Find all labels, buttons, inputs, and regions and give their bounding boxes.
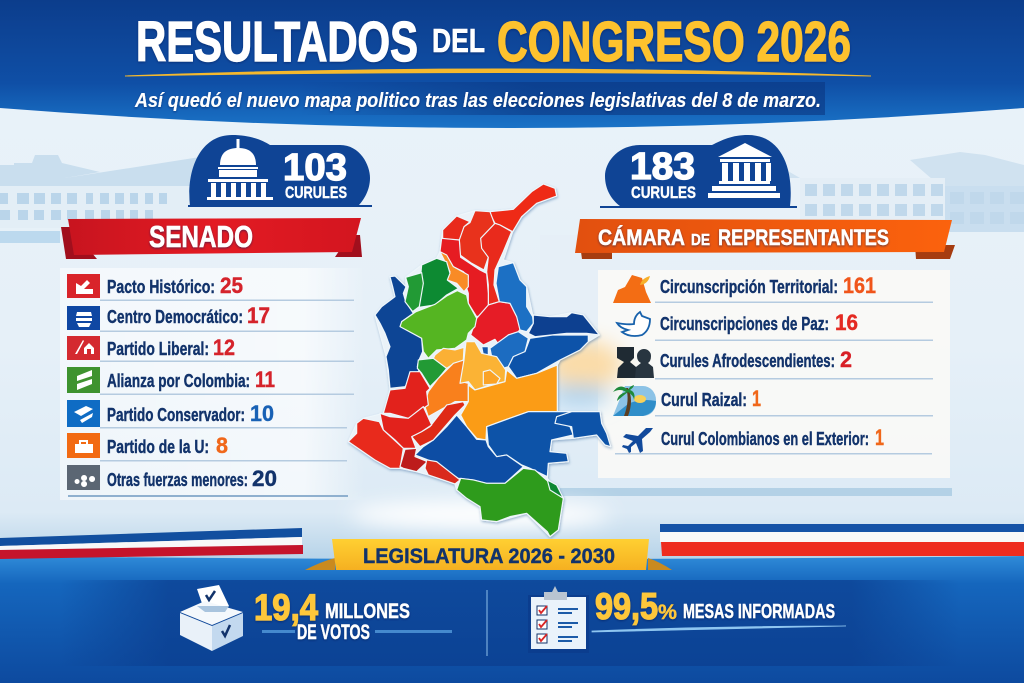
stat: mesas informadas: 99,5 [595,586,658,627]
region: Caldas [433,347,464,368]
banner text: SENADO [149,219,253,254]
icon: ballot box [180,585,243,651]
row: Pacto Historico: Pacto Histórico: [107,277,215,297]
stat: mesas informadas: % [658,601,677,624]
stats strip [60,580,960,666]
region: Cundinamarca [460,342,506,390]
stat: votos: DE VOTOS [297,621,370,644]
number 103: 103 [283,147,347,189]
camara seat badge [600,135,797,208]
row: Curul Raizal [613,385,933,416]
row: Curul Colombianos en el Exterior [615,425,932,454]
row: Curules Afrodescendientes: Curules Afrodescendientes: [660,351,835,371]
region: Cesar [481,223,512,305]
row: Alianza por Colombia [67,367,354,395]
badge baseline [600,206,797,208]
region: Bogota [483,370,500,385]
stat: mesas informadas: MESAS INFORMADAS [683,601,835,623]
banner text: LEGISLATURA 2026 - 2030 [363,545,615,568]
row: Partido Conservador: Partido Conservador: [107,405,245,425]
colombia map [348,184,611,537]
region: Cordoba [440,252,468,292]
region: Boyaca [471,302,525,347]
panel: senado list background [60,268,365,500]
row: Partido de la U: 8 [216,433,228,458]
region: Bolivar sur [440,238,488,317]
icon: clipboard checklist [528,586,589,653]
region: Casanare [490,332,528,368]
stat underline: mesas [592,626,846,632]
subtitle: Así quedó el nuevo mapa politico tras las elecciones legislativas del 8 de marzo. [134,90,821,112]
region: Antioquia [400,291,477,358]
region: Vaupes [555,412,611,447]
background: faint congress buildings [0,145,1024,325]
row: Alianza por Colombia: 11 [255,367,275,392]
banner text: DE [691,232,710,249]
title: RESULTADOS [136,10,418,74]
region: Putumayo este [425,460,460,484]
region: Huila [412,402,465,447]
row: Curul Colombianos en el Exterior: 1 [875,425,884,450]
number 183: 183 [630,146,695,188]
subtitle strip [300,82,825,115]
banner text: REPRESENTANTES [718,225,889,250]
row: Partido Liberal: 12 [213,335,235,360]
row: Centro Democratico [67,303,354,332]
background glow near map [350,341,623,529]
title: CONGRESO 2026 [497,10,851,74]
senado seat badge [188,135,372,207]
region: Bolivar norte [443,216,470,240]
stat: mesas informadas [595,586,835,627]
label curules: CURULES [631,183,696,202]
row: Partido Liberal: Partido Liberal: [107,339,209,359]
senado list [67,273,354,497]
banner body [68,218,361,255]
region: Valle [383,372,430,418]
region: Vichada [508,335,588,378]
row: Otras fuerzas menores: Otras fuerzas menores: [107,470,248,490]
badge baseline [188,205,372,207]
banner tails [580,245,955,259]
region: Amazonas [457,468,563,537]
row: Circunscripciones de Paz: 16 [835,310,858,335]
panel: camara list background [560,270,952,496]
badge shape [189,135,370,206]
region: small blue [482,347,488,355]
row: Centro Democratico: Centro Democrático: [107,307,243,327]
region: Arauca [528,313,599,337]
stat: votos [254,587,410,644]
region: Putumayo [400,448,427,472]
region: Uraba [405,273,423,312]
stat: votos: MILLONES [325,600,410,623]
title underline [125,69,871,76]
row: Curul Colombianos en el Exterior: Curul Colombianos en el Exterior: [661,429,869,449]
row: Circunscripciones de Paz [617,310,933,341]
banner tails [61,227,362,259]
row: Pacto Historico: 25 [220,273,243,298]
banner body [575,219,952,253]
region: Magdalena [459,211,495,270]
camara list [613,273,933,454]
region: Choco [375,276,423,388]
region: Caqueta [415,415,523,483]
title: DEL [432,22,485,59]
region: Norte de Santander [496,263,533,332]
row: Otras fuerzas menores [67,465,348,497]
region: Eje cafetero [417,358,447,387]
row: Partido de la U: Partido de la U: [107,437,209,457]
icon: capitol building [207,139,273,200]
row: Curules Afrodescendientes [617,347,933,380]
row: Centro Democratico: 17 [247,303,270,328]
banner body [332,539,649,570]
header band [0,0,1024,128]
banner text: CÁMARA [598,225,685,250]
camara banner [575,219,955,259]
row: Curules Afrodescendientes: 2 [840,347,852,372]
row: Circunscripcion Territorial: 161 [843,273,876,298]
stat underline: votos [262,630,452,633]
region: Guajira [490,184,557,232]
flag ribbon left [0,528,303,559]
stat: votos: 19,4 [254,587,318,628]
row: Circunscripcion Territorial: Circunscripción Territorial: [660,277,838,297]
divider [486,590,488,656]
row: Partido Conservador: 10 [250,401,274,426]
map silhouette [348,184,611,537]
region: Meta [461,365,557,440]
region: Cauca [380,407,432,448]
flag ribbon right [660,524,1024,556]
region: Guainia [487,412,573,477]
banner text [598,225,889,250]
row: Otras fuerzas menores: 20 [252,466,277,491]
legislatura banner [305,539,672,570]
region: Amazonas este [547,480,563,498]
title [136,10,851,74]
row: Circunscripcion Territorial [613,273,933,303]
row: Pacto Historico [67,273,354,301]
senado banner [61,218,362,259]
row: Curul Raizal: 1 [752,386,761,411]
region: Narino [348,418,403,468]
banner tails [305,558,672,570]
row: Circunscripciones de Paz: Circunscripciones de Paz: [660,314,829,334]
row: Alianza por Colombia: Alianza por Colombia: [107,371,250,391]
row: Partido de la U [67,433,347,462]
region: Tolima [424,360,468,417]
row: Curul Raizal: Curul Raizal: [661,390,747,410]
row: Partido Conservador [67,400,347,428]
label curules: CURULES [285,183,347,202]
icon: columned courthouse [708,143,780,198]
region: Antioquia norte [419,258,458,307]
badge shape [605,135,791,206]
row: Partido Liberal [67,335,354,362]
footer band [0,556,1024,683]
